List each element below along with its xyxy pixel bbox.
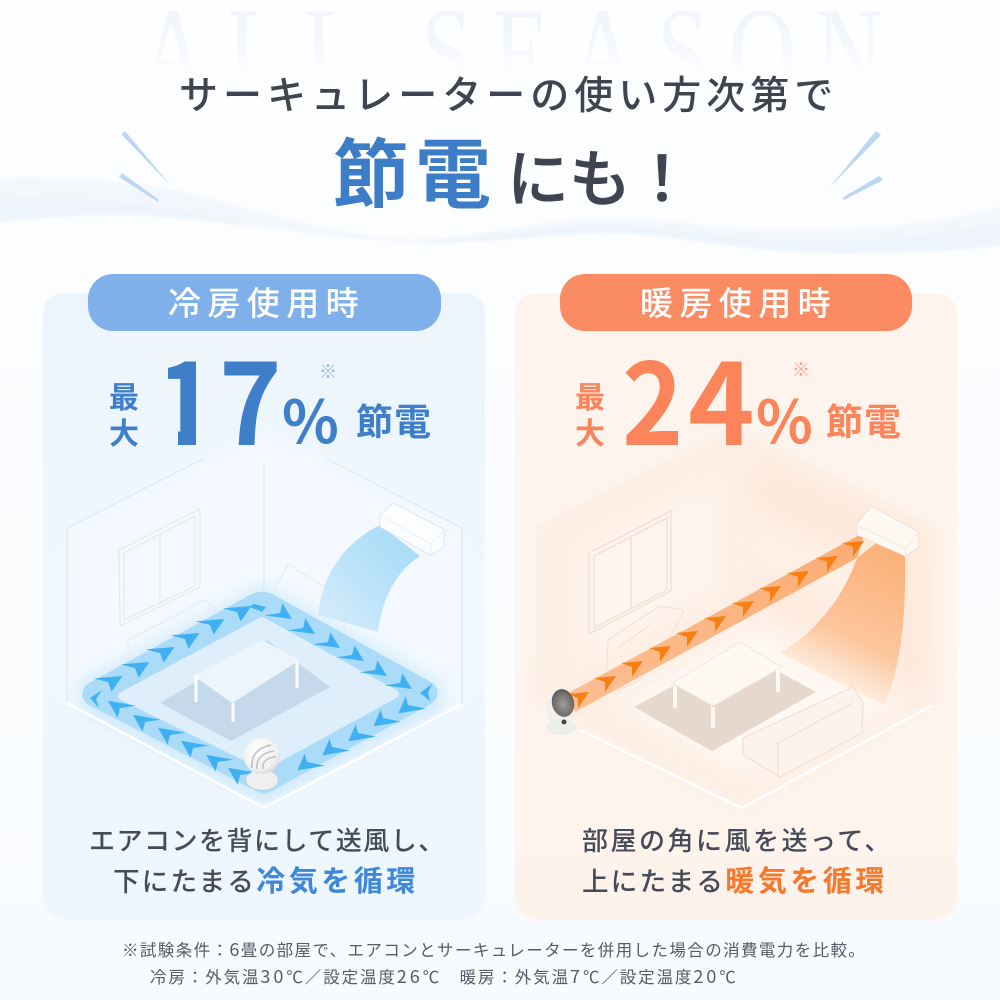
footnote: 冷房：外気温30℃／設定温度26℃ 暖房：外気温7℃／設定温度20℃ [150, 963, 738, 989]
air conditioner [380, 503, 445, 555]
caption: 部屋の角に風を送って、 [582, 821, 893, 858]
rug [634, 650, 816, 751]
window [589, 511, 671, 634]
pill heading: 冷房使用時: 冷房使用時 [168, 277, 365, 325]
stat: 最大24%節電: 節電 [826, 392, 902, 446]
stat: 最大17%節電: 7 [219, 314, 282, 478]
pill heading: 冷房使用時 [88, 274, 441, 331]
illustration: cooling room [67, 428, 462, 808]
heading: 節電: 節電 [333, 114, 497, 224]
circulator fan [546, 687, 577, 735]
stat: 最大17%節電 [110, 362, 430, 447]
stat: 最大17%節電: 最 [109, 373, 139, 417]
stat: 最大24%節電: 最 [575, 373, 605, 417]
heading line 2 [333, 114, 693, 224]
stat: 最大24%節電: 2 [622, 315, 683, 478]
arrows [567, 541, 864, 708]
pill heading: 暖房使用時 [560, 274, 912, 331]
panel background [515, 293, 957, 919]
caption [582, 821, 893, 900]
heading line 1: サーキュレーターの使い方次第で [179, 65, 838, 121]
heading: にも！: にも！ [507, 129, 693, 219]
circulator fan [244, 738, 280, 790]
pill heading: 暖房使用時: 暖房使用時 [640, 277, 837, 325]
stat: 最大24%節電 [575, 314, 902, 478]
footnote: ※試験条件：6畳の部屋で、エアコンとサーキュレーターを併用した場合の消費電力を比較。 [122, 936, 866, 962]
sofa under window [607, 606, 684, 690]
panel background [43, 293, 485, 919]
air beam to AC [570, 532, 865, 712]
stat: 最大17%節電: % [282, 375, 339, 460]
stat: 最大17%節電: 大 [109, 409, 139, 453]
stat: 最大17%節電: ※ [319, 358, 337, 384]
stat: 最大24%節電: 4 [688, 314, 755, 478]
illustration: heating room [538, 428, 933, 808]
sofa front [743, 687, 863, 777]
window [119, 509, 200, 626]
circulating air band [95, 604, 425, 781]
stat: 最大24%節電: 大 [575, 409, 605, 453]
caption: 下にたまる冷気を循環 [113, 858, 419, 900]
panel: heating [515, 274, 957, 919]
table [194, 640, 300, 722]
background wave [0, 177, 1000, 253]
panel: cooling [43, 274, 485, 919]
stat: 最大17%節電: 節電 [356, 392, 432, 446]
air flow from AC [318, 525, 420, 632]
caption [89, 821, 446, 900]
rug [160, 640, 330, 741]
stat: 最大24%節電: ※ [792, 356, 810, 382]
accent strokes left [119, 131, 172, 202]
accent strokes right [829, 131, 883, 200]
caption: 上にたまる暖気を循環 [582, 858, 888, 900]
table [672, 642, 782, 728]
stat: 最大24%節電: % [756, 375, 813, 460]
arrows [90, 603, 432, 785]
warm air sweep [780, 540, 905, 705]
caption: エアコンを背にして送風し、 [89, 821, 446, 858]
air conditioner [856, 506, 919, 556]
sofa outlines [128, 564, 370, 765]
footnote [122, 936, 866, 989]
stat: 最大17%節電: 1 [153, 314, 220, 478]
